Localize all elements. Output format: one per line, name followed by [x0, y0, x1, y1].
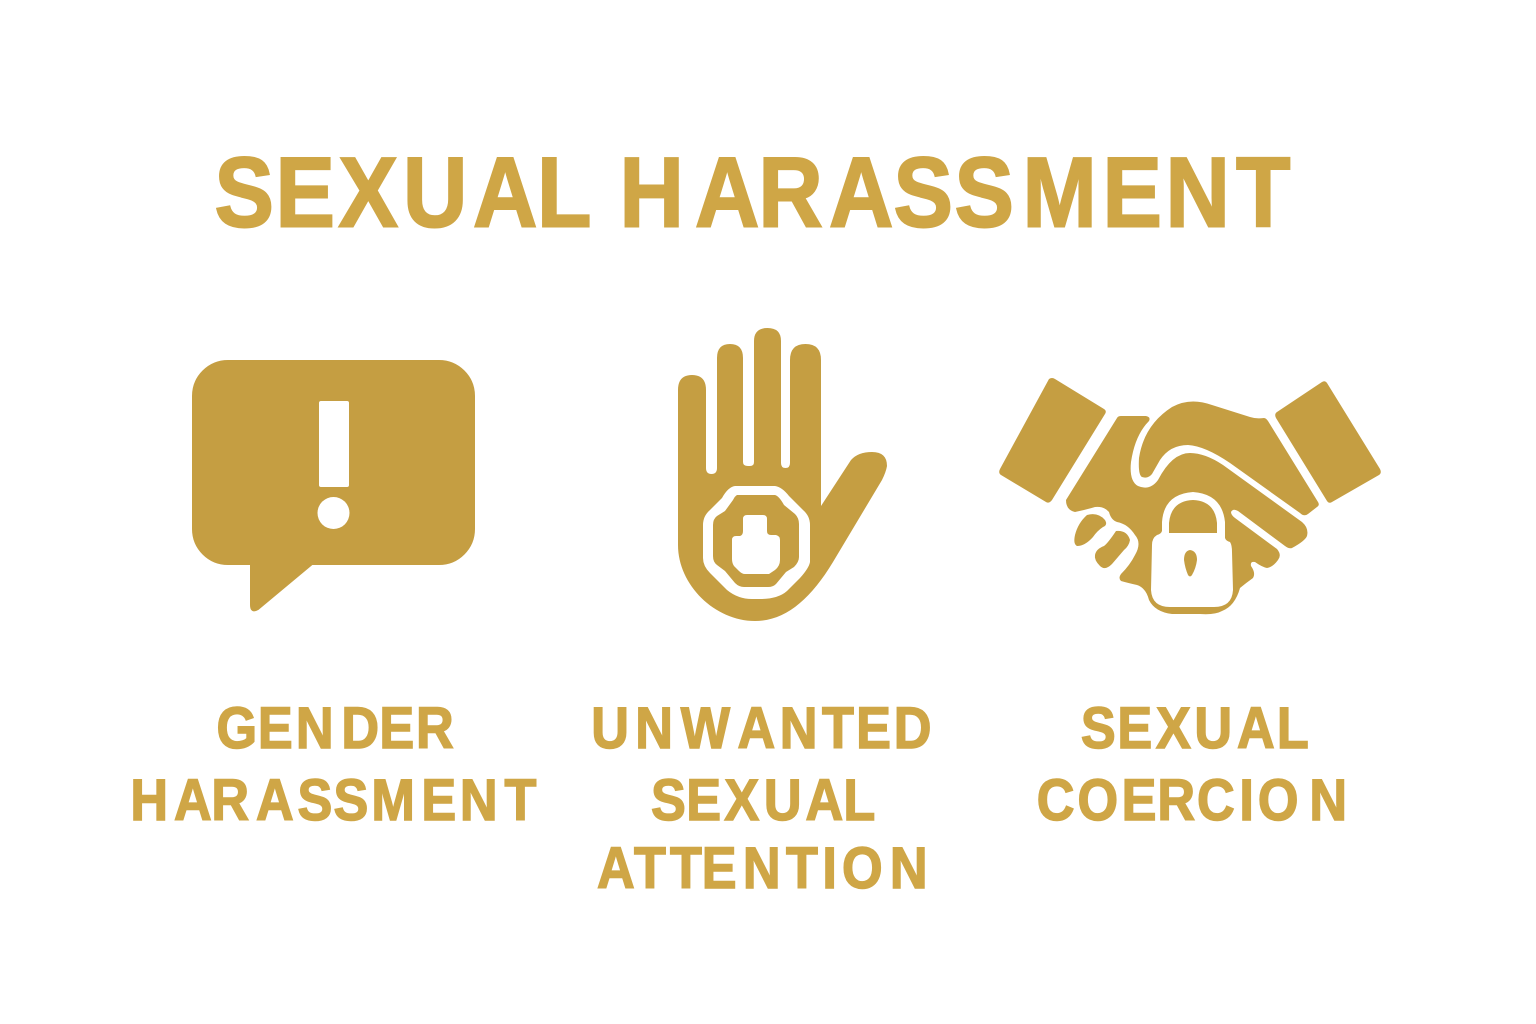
lower-left hand [1066, 416, 1307, 614]
label: gender harassment: HARASSMENT [130, 767, 537, 833]
finger one [1074, 514, 1106, 546]
label: gender harassment: GENDER [217, 696, 454, 761]
label: sexual coercion: SEXUAL [1081, 696, 1309, 761]
right cuff [1275, 381, 1381, 503]
padlock [1151, 492, 1233, 607]
label: sexual coercion: COERCION [1037, 767, 1347, 833]
label: unwanted sexual attention: ATTENTION [597, 835, 928, 901]
title: SEXUAL HARASSMENT [214, 137, 1290, 248]
left cuff [999, 378, 1106, 503]
icon: raised hand with lock symbol [678, 328, 887, 621]
finger two [1095, 531, 1130, 568]
label: sexual coercion [1037, 696, 1347, 833]
padlock shackle opening [1169, 500, 1217, 533]
label: unwanted sexual attention [591, 696, 931, 901]
keyhole [1184, 550, 1197, 576]
label: unwanted sexual attention: UNWANTED [591, 696, 931, 761]
upper-right hand [1139, 401, 1319, 515]
icon: speech bubble with exclamation mark [193, 361, 474, 610]
icon: handshake with padlock [999, 378, 1381, 614]
label: unwanted sexual attention: SEXUAL [651, 767, 875, 833]
label: gender harassment [130, 696, 537, 833]
